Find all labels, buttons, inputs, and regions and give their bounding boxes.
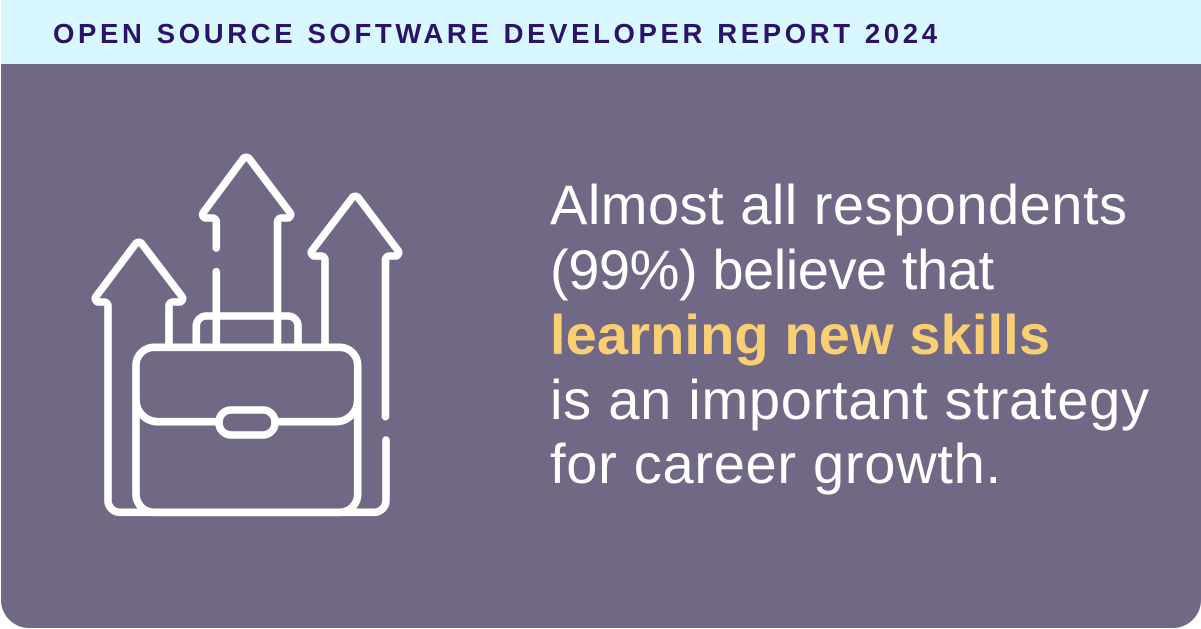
icon part: clasp	[219, 410, 275, 435]
icon part: handle	[196, 316, 298, 347]
icon part: flap	[136, 400, 358, 422]
header band	[1, 0, 1201, 64]
icon part: left arrow and base line	[95, 242, 386, 512]
header title: OPEN SOURCE SOFTWARE DEVELOPER REPORT 2024	[53, 18, 938, 49]
icon part: right arrow	[311, 196, 399, 417]
line 1: Almost all respondents	[550, 173, 1127, 236]
line 5: for career growth.	[550, 432, 1001, 495]
highlighted line: learning new skills	[550, 303, 1050, 366]
line 4: is an important strategy	[550, 368, 1149, 431]
icon part: middle arrow	[203, 157, 291, 345]
icon part: case body	[136, 347, 358, 512]
icon: briefcase with rising arrows	[95, 157, 399, 512]
line 2: (99%) believe that	[550, 238, 994, 301]
statement text	[550, 173, 1149, 495]
